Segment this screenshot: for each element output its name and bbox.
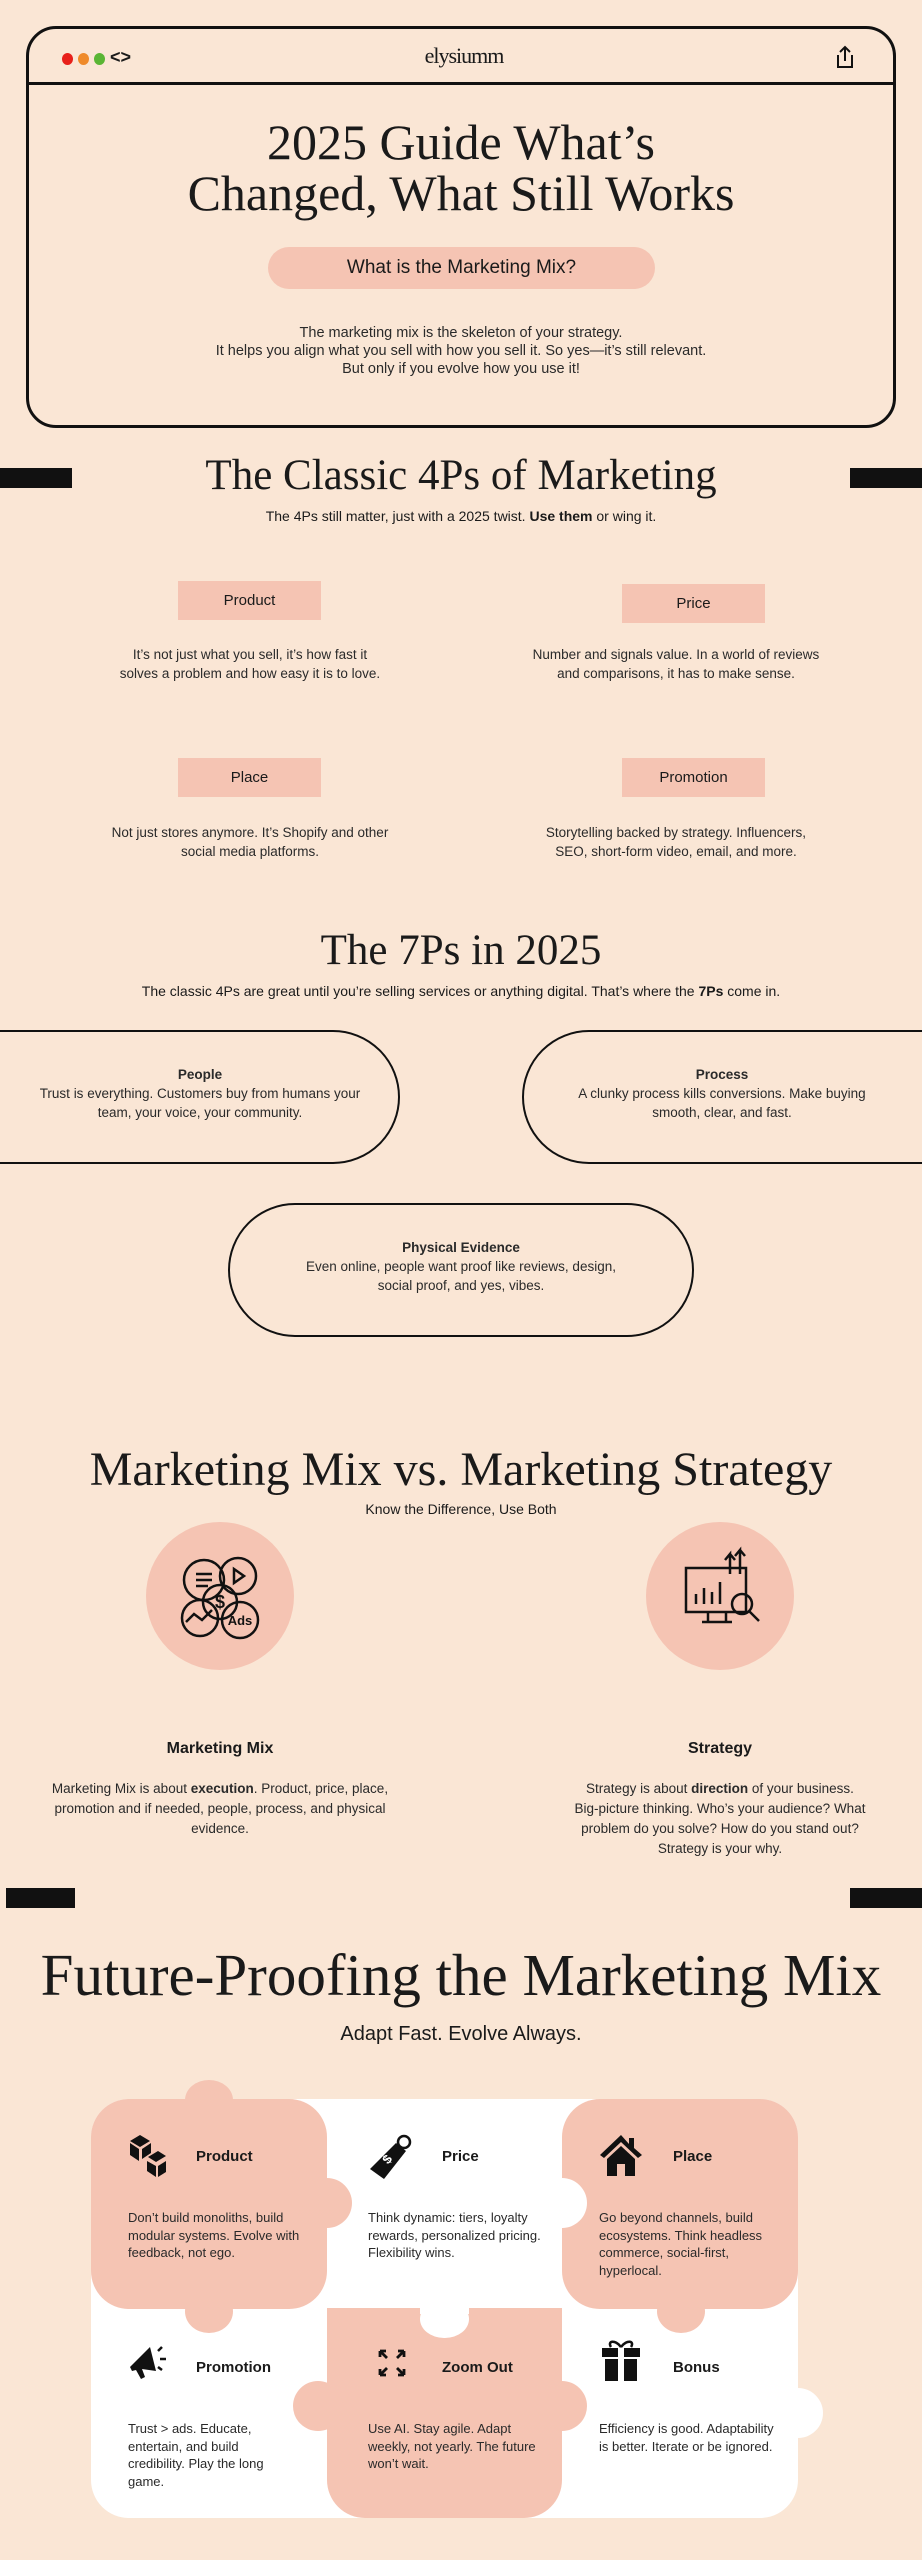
4P: promotion: SEO, short-form video, email, and more.: [555, 844, 797, 859]
heading: classic 4Ps: The Classic 4Ps of Marketing: [205, 452, 717, 499]
icon: boxes: [130, 2135, 166, 2177]
subtitle 4Ps: The 4Ps still matter, just with a 2025 twist. Use them or wing it.: [266, 508, 656, 524]
pill: what is the marketing mix: [268, 247, 655, 289]
label: Price: [442, 2148, 479, 2165]
icon: strategy circle: [646, 1522, 794, 1670]
icon: house: [600, 2135, 642, 2176]
title: Changed, What Still Works: [188, 165, 734, 221]
text: marketing mix: Marketing Mix is about execution. Product, price, place,: [52, 1781, 388, 1796]
4P: promotion: Storytelling backed by strategy. Influencers,: [546, 825, 806, 840]
label: Zoom Out: [442, 2359, 513, 2376]
label: Promotion: [196, 2359, 271, 2376]
puzzle grid: [91, 2080, 823, 2518]
4P: price: and comparisons, it has to make sense.: [557, 666, 795, 681]
column: strategy: [575, 1522, 866, 1856]
subtitle 7Ps: The classic 4Ps are great until you’re selling services or anything digital. That’s where the 7Ps come in.: [142, 983, 780, 999]
desc: is better. Iterate or be ignored.: [599, 2438, 772, 2454]
4P: price: [533, 584, 819, 681]
label: strategy: Strategy: [688, 1740, 752, 1757]
4P: product: [120, 581, 380, 681]
puzzle: bonus: [599, 2340, 774, 2454]
heading: 7Ps: The 7Ps in 2025: [321, 927, 601, 974]
pill: physical evidence: Physical Evidence: [402, 1240, 520, 1255]
4P: price: Price: [676, 595, 711, 612]
column: marketing mix: [52, 1522, 388, 1836]
pill: process: Process: [696, 1067, 748, 1082]
label: Product: [196, 2148, 253, 2165]
pill: process: smooth, clear, and fast.: [652, 1105, 792, 1120]
desc: Don’t build monoliths, build modular systems. Evolve with feedback, not ego.: [128, 2210, 299, 2260]
icon: marketing mix circle: Ads: [228, 1613, 252, 1628]
browser header bar: [29, 29, 893, 85]
icon: share: [837, 46, 853, 68]
4P: product: Product: [224, 592, 275, 609]
subtitle mix vs strategy: Know the Difference, Use Both: [365, 1501, 557, 1517]
pill: physical evidence: [228, 1203, 694, 1337]
intro text: [216, 325, 706, 377]
desc: Go beyond channels, build ecosystems. Think headless commerce, social-first, hyperlocal.: [599, 2210, 762, 2278]
title: 2025 Guide What’s: [267, 114, 655, 170]
4P: place: [112, 758, 388, 859]
4P: product: solves a problem and how easy it is to love.: [120, 666, 380, 681]
browser frame: [26, 26, 896, 428]
title: [188, 114, 734, 221]
heading: future-proofing: Future-Proofing the Marketing Mix: [41, 1942, 881, 2008]
4P: place: social media platforms.: [181, 844, 319, 859]
pill: process: A clunky process kills conversions. Make buying: [578, 1086, 866, 1101]
text: marketing mix: evidence.: [191, 1821, 249, 1836]
4P: place: Place: [231, 769, 268, 786]
icon: marketing mix circle: $: [215, 1592, 225, 1612]
label: Bonus: [673, 2359, 720, 2376]
desc: Trust > ads. Educate, entertain, and build credibility. Play the long game.: [128, 2421, 264, 2488]
desc: [599, 2421, 774, 2454]
4P: promotion: Promotion: [659, 769, 728, 786]
pill: physical evidence: Even online, people want proof like reviews, design,: [306, 1259, 616, 1274]
icon: price tag: [370, 2134, 412, 2179]
icon: marketing mix circle: [146, 1522, 294, 1670]
pill: physical evidence: social proof, and yes, vibes.: [378, 1278, 544, 1293]
text: strategy: [575, 1781, 866, 1856]
icon: price tag: $: [379, 2151, 396, 2167]
heading: mix vs strategy: Marketing Mix vs. Marketing Strategy: [90, 1443, 832, 1496]
desc: Use AI. Stay agile. Adapt weekly, not yearly. The future won’t wait.: [368, 2421, 536, 2471]
text: strategy: Strategy is about direction of your business.: [586, 1781, 854, 1796]
icon: window dots: <>: [110, 47, 131, 67]
puzzle: promotion: [128, 2346, 271, 2488]
subtitle: adapt fast: Adapt Fast. Evolve Always.: [340, 2023, 582, 2045]
text: strategy: Big-picture thinking. Who’s your audience? What: [575, 1801, 865, 1816]
puzzle: price: [368, 2134, 541, 2260]
label: Place: [673, 2148, 712, 2165]
intro text: But only if you evolve how you use it!: [342, 361, 580, 377]
4P: product: It’s not just what you sell, it’s how fast it: [133, 647, 367, 662]
intro text: The marketing mix is the skeleton of your strategy.: [300, 325, 622, 341]
pill: what is the marketing mix: What is the Marketing Mix?: [347, 257, 576, 278]
text: strategy: problem do you solve? How do you stand out?: [581, 1821, 859, 1836]
desc: Think dynamic: tiers, loyalty rewards, personalized pricing. Flexibility wins.: [368, 2210, 541, 2260]
4P: price: Number and signals value. In a world of reviews: [533, 647, 819, 662]
icon: gift: [602, 2340, 640, 2381]
puzzle: zoom out: [368, 2350, 536, 2471]
icon: zoom out arrows: [378, 2350, 406, 2376]
text: marketing mix: [52, 1781, 388, 1836]
intro text: It helps you align what you sell with how you sell it. So yes—it’s still relevant.: [216, 343, 706, 359]
label: marketing mix: Marketing Mix: [167, 1740, 273, 1757]
icon: megaphone: [130, 2346, 166, 2379]
pill: people: [0, 1030, 400, 1164]
4P: promotion: [546, 758, 806, 859]
puzzle: place: [599, 2135, 762, 2278]
logo: elysiumm: [425, 43, 503, 68]
text: marketing mix: promotion and if needed, people, process, and physical: [55, 1801, 385, 1816]
pill: people: People: [178, 1067, 222, 1082]
pill: process: [522, 1030, 922, 1164]
text: strategy: Strategy is your why.: [658, 1841, 782, 1856]
pill: people: team, your voice, your community.: [98, 1105, 302, 1120]
pill: people: Trust is everything. Customers buy from humans your: [40, 1086, 360, 1101]
desc: Efficiency is good. Adaptability: [599, 2421, 774, 2436]
4P: place: Not just stores anymore. It’s Shopify and other: [112, 825, 388, 840]
puzzle: product: [128, 2135, 299, 2260]
icon: window dots: [62, 47, 131, 67]
